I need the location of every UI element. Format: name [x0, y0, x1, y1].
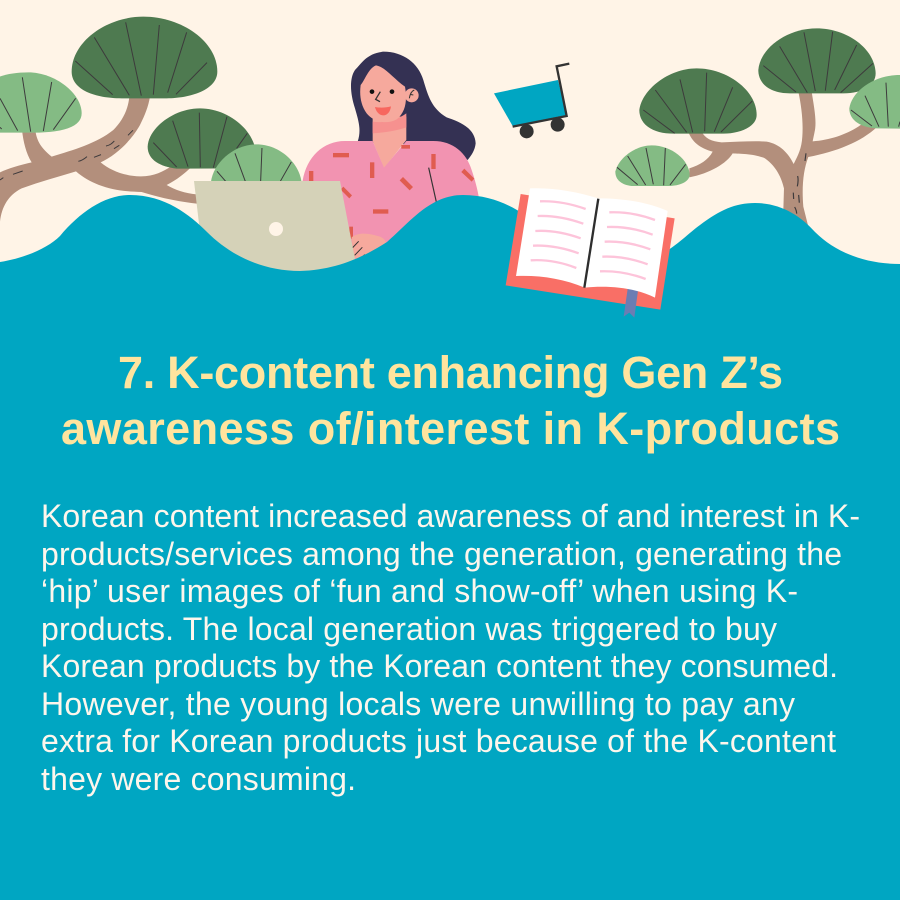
canopy: light right — [849, 75, 900, 129]
ear detail — [409, 90, 414, 98]
illustration: woman — [303, 52, 479, 263]
heading: 7. K-content enhancing Gen Z’s — [118, 347, 783, 398]
tree trunk and branches — [0, 97, 200, 222]
book spine — [584, 199, 598, 288]
neck — [373, 117, 406, 168]
eyes — [370, 89, 394, 94]
canopy: mid dark — [639, 68, 757, 134]
body text: However, the young locals were unwilling to pay any — [41, 686, 795, 722]
heading — [61, 347, 840, 454]
bark marks — [0, 130, 133, 180]
bookmark ribbon — [624, 287, 638, 318]
illustration: shopping cart — [494, 64, 569, 138]
illustration: left pine tree — [0, 17, 302, 222]
canopy: large dark — [758, 28, 876, 93]
canopy: large dark — [72, 17, 217, 98]
shirt pattern — [309, 145, 474, 239]
body text: products. The local generation was triggered to buy — [41, 611, 777, 647]
book cover — [506, 194, 675, 310]
body text: extra for Korean products just because of the K-content — [41, 723, 836, 759]
ear — [405, 88, 419, 102]
cart wheels — [520, 118, 565, 138]
canopy needles — [153, 113, 247, 168]
face — [360, 65, 406, 122]
canopy needles — [763, 32, 873, 93]
laptop — [194, 181, 358, 275]
illustration: right pine tree — [615, 28, 900, 233]
canopy: light front — [211, 144, 302, 183]
cart basket — [494, 80, 567, 126]
book pages — [516, 188, 668, 298]
body text: Korean products by the Korean content they consumed. — [41, 648, 838, 684]
body text: products/services among the generation, generating the — [41, 536, 842, 572]
canopy needles — [75, 22, 207, 96]
hair — [351, 52, 476, 160]
shirt — [303, 141, 479, 260]
teal wave and background panel — [0, 195, 900, 900]
tree trunk and branches — [688, 92, 877, 233]
body text: Korean content increased awareness of and interest in K- — [41, 498, 860, 534]
neck shadow — [373, 113, 406, 133]
canopy needles — [217, 148, 291, 181]
text lines on pages — [531, 201, 655, 279]
body text: ‘hip’ user images of ‘fun and show-off’ when using K- — [41, 573, 798, 609]
fingers — [353, 241, 365, 258]
bark marks — [793, 153, 806, 214]
body text: they were consuming. — [41, 761, 356, 797]
canopy: light left — [0, 72, 82, 133]
canopy: middle dark — [148, 108, 257, 169]
heading: awareness of/interest in K-products — [61, 403, 840, 454]
laptop lid — [194, 181, 358, 275]
laptop logo — [269, 222, 283, 236]
canopy needles — [851, 83, 900, 127]
canopy needles — [643, 73, 752, 133]
illustration: open book — [506, 188, 675, 318]
sleeve line — [429, 168, 437, 203]
nose — [376, 92, 380, 102]
cart frame — [513, 64, 569, 127]
canopy needles — [0, 77, 76, 132]
canopy: light left — [615, 145, 690, 186]
hand — [352, 234, 387, 263]
mouth — [375, 106, 391, 115]
canopy needles — [617, 148, 686, 185]
body text — [41, 498, 860, 797]
